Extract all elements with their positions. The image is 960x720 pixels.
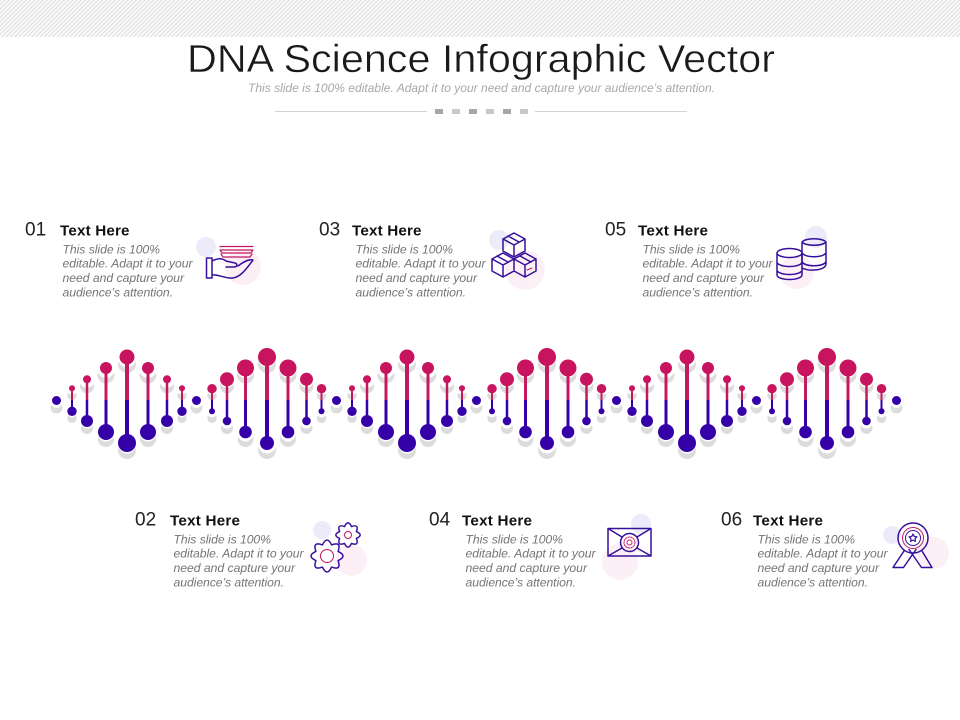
body 03: editable. Adapt it to your <box>356 256 486 270</box>
helix period 2 <box>330 348 606 459</box>
body 02: This slide is 100% <box>174 532 271 546</box>
body 04 <box>466 532 596 590</box>
body 06: need and capture your <box>758 561 880 575</box>
item 04 <box>429 510 651 590</box>
icon: award ribbon <box>883 523 949 569</box>
body 04: need and capture your <box>466 561 588 575</box>
header divider <box>275 109 687 114</box>
number 03: 03 <box>319 220 340 241</box>
helix period 1 <box>50 348 326 459</box>
body 01: This slide is 100% <box>62 242 160 256</box>
body 05: This slide is 100% <box>642 242 740 256</box>
body 06: audience’s attention. <box>758 576 868 590</box>
body 02 <box>174 532 304 590</box>
body 05 <box>642 242 773 300</box>
body 03: need and capture your <box>356 271 478 285</box>
subtitle: This slide is 100% editable. Adapt it to your need and capture your audience’s attention. <box>248 81 715 95</box>
number 01: 01 <box>25 220 46 241</box>
hatched top band <box>0 0 960 37</box>
DNA helix chart <box>50 348 902 459</box>
body 01: audience’s attention. <box>62 286 173 300</box>
body 02: audience’s attention. <box>174 576 284 590</box>
body 02: editable. Adapt it to your <box>174 546 304 560</box>
helix end dot <box>890 396 902 414</box>
heading 05: Text Here <box>638 223 708 240</box>
item 03 <box>319 220 545 300</box>
number 04: 04 <box>429 510 451 531</box>
number 06: 06 <box>721 510 742 531</box>
helix period 3 <box>610 348 886 459</box>
heading 04: Text Here <box>462 513 532 530</box>
body 04: This slide is 100% <box>466 532 563 546</box>
heading 02: Text Here <box>170 513 240 530</box>
number 05: 05 <box>605 220 626 241</box>
icon: stacked coins <box>777 226 827 289</box>
item 06 <box>721 510 949 590</box>
body 02: need and capture your <box>174 561 296 575</box>
body 05: need and capture your <box>642 271 765 285</box>
body 01: editable. Adapt it to your <box>62 256 193 270</box>
icon: boxes <box>489 230 545 290</box>
body 01 <box>62 242 193 300</box>
icon: envelope with seal <box>602 514 651 580</box>
body 05: audience’s attention. <box>642 286 753 300</box>
title: DNA Science Infographic Vector <box>187 38 775 81</box>
body 03: audience’s attention. <box>356 286 466 300</box>
icon: gears <box>311 521 367 576</box>
body 06: editable. Adapt it to your <box>758 546 888 560</box>
heading 01: Text Here <box>60 223 130 240</box>
body 06: This slide is 100% <box>758 532 855 546</box>
body 05: editable. Adapt it to your <box>642 256 773 270</box>
body 06 <box>758 532 888 590</box>
body 03: This slide is 100% <box>356 242 453 256</box>
icon: hand holding stack <box>196 237 261 285</box>
heading 06: Text Here <box>753 513 823 530</box>
body 01: need and capture your <box>62 271 185 285</box>
item 02 <box>135 510 367 590</box>
body 03 <box>356 242 486 300</box>
item 05 <box>605 220 827 300</box>
body 04: editable. Adapt it to your <box>466 546 596 560</box>
heading 03: Text Here <box>352 223 422 240</box>
body 04: audience’s attention. <box>466 576 576 590</box>
item 01 <box>25 220 261 300</box>
number 02: 02 <box>135 510 156 531</box>
